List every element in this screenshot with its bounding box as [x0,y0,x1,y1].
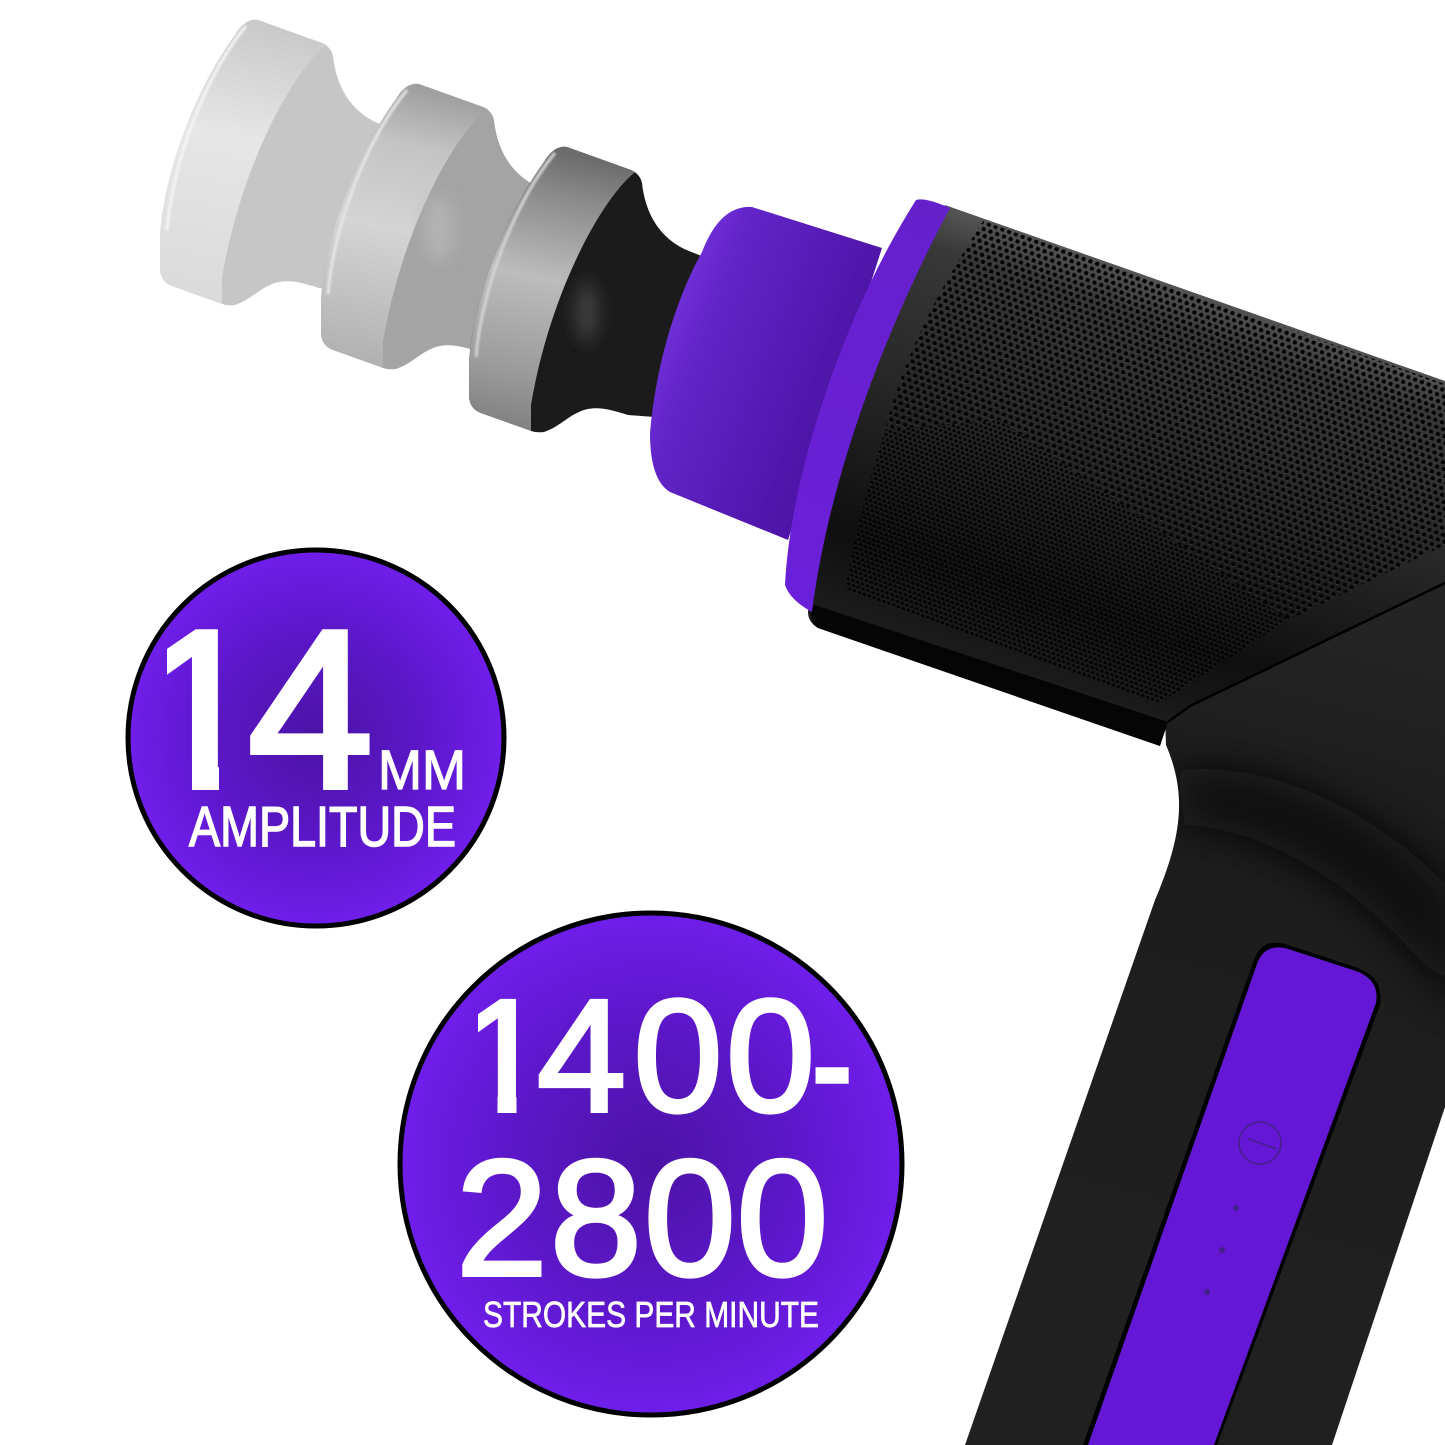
value: 1400- [478,997,849,1115]
indicator dots [1204,1205,1239,1295]
massage head: faded position 1 [160,20,410,305]
unit: MM: MM [378,738,466,801]
value: 14 [167,629,370,790]
motor housing [808,205,1445,746]
icon: power button [1239,1122,1281,1164]
perforated grill: coarse [885,221,1445,620]
value: 2800: 2800 [456,1126,828,1310]
perforated grill: fine [845,420,1288,703]
bottom lip [811,604,1168,746]
value: 1400-: 1 [460,966,549,1145]
badge circle [400,913,902,1415]
label: amplitude: AMPLITUDE [189,795,456,859]
handle shoulder shadow [1175,769,1445,1010]
handle [965,583,1445,1445]
value: 14: 1 [138,583,264,835]
housing to handle seam [1168,583,1445,722]
badge: strokes per minute [400,913,902,1415]
badge circle [128,550,504,926]
badge: amplitude [128,550,504,926]
purple ring [785,199,950,612]
purple collar [650,207,882,540]
value: 1400-: 400 [537,966,815,1145]
control panel [1088,947,1377,1445]
control panel surround [1083,943,1381,1445]
massage head: faded position 2 [321,84,571,369]
label: strokes per minute: STROKES PER MINUTE [483,1294,819,1335]
value: 1400-: - [812,973,853,1152]
value: 14: 4 [248,583,373,835]
massage head: metal rim and black neck [469,147,719,432]
